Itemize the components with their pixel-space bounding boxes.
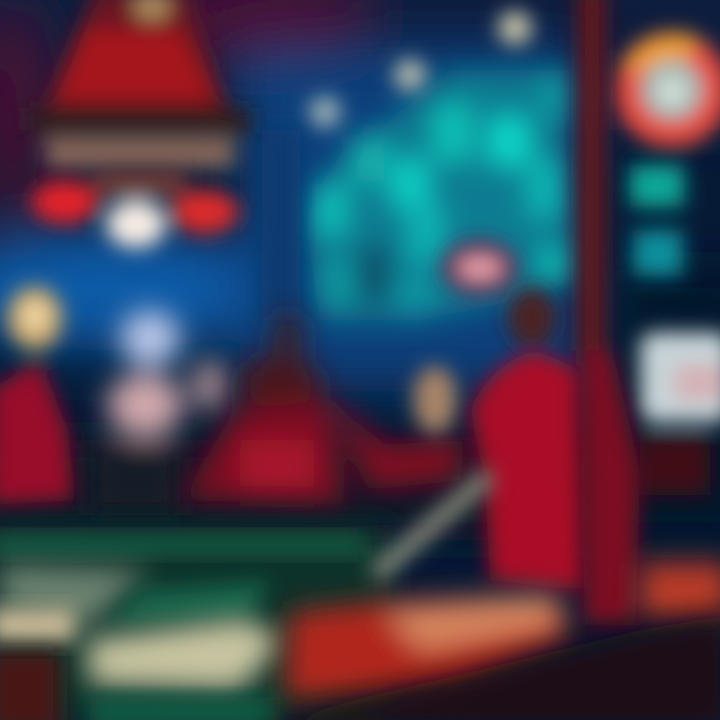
dark foreground shelf <box>270 615 720 720</box>
stacked red gift boxes <box>270 562 720 720</box>
blue support post <box>262 130 300 320</box>
diagonal table rail <box>375 475 490 575</box>
green table <box>0 525 390 720</box>
red vertical pole <box>578 0 640 625</box>
right white screen <box>640 332 720 495</box>
person: left with yellow head <box>0 286 75 505</box>
person: right large in red <box>413 288 585 590</box>
teal light wall <box>305 70 575 320</box>
person: white figure <box>90 310 228 515</box>
hanging star lights <box>309 11 532 128</box>
right teal panels <box>630 165 684 276</box>
small pink sign <box>442 240 518 296</box>
person: centre in red <box>180 313 465 505</box>
right round wheel sign <box>614 32 720 148</box>
red lantern <box>30 0 250 248</box>
